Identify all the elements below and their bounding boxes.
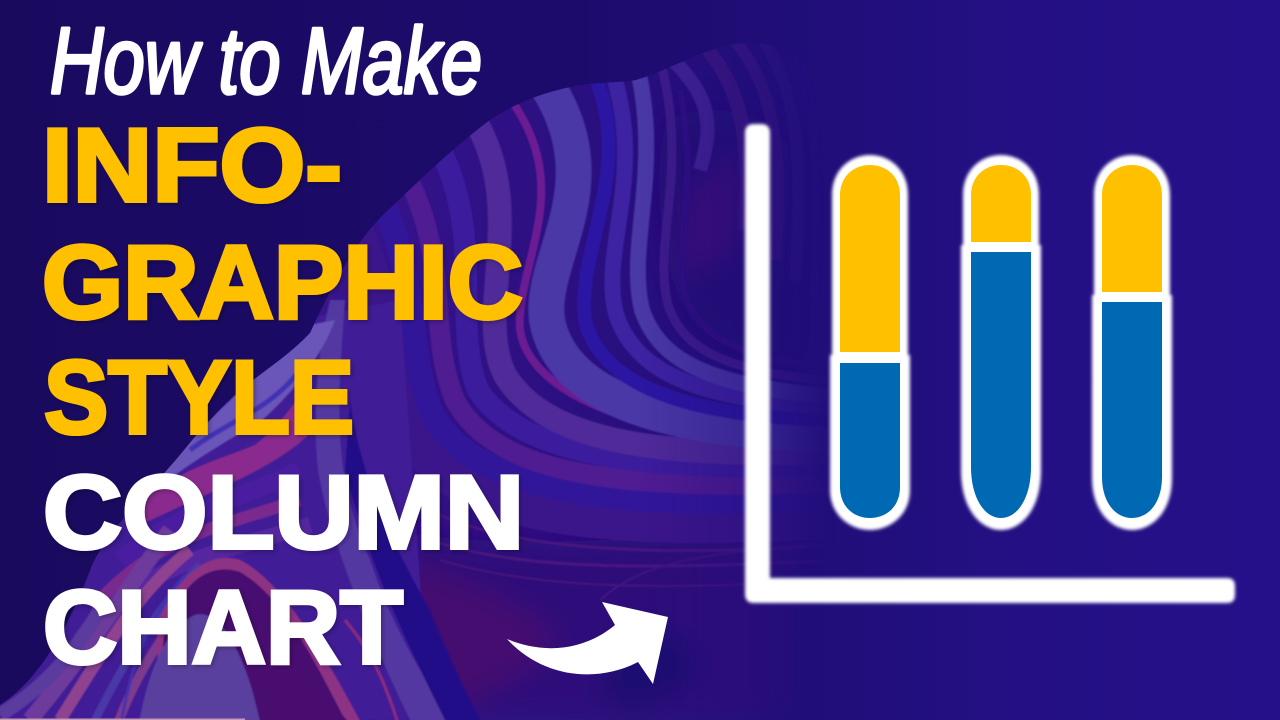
heading line: chart: CHART	[43, 570, 403, 686]
column 2	[961, 155, 1041, 530]
chart axes	[745, 124, 1235, 603]
fine lower contour lines	[421, 506, 798, 552]
heading line: style: STYLE	[44, 340, 354, 456]
soft colour fields	[418, 168, 744, 715]
lower left tent shapes	[157, 558, 365, 720]
bottom edge highlight	[0, 718, 245, 720]
column chart	[745, 124, 1235, 603]
heading: infographic style column chart	[42, 108, 524, 686]
abstract wave artwork	[0, 44, 810, 720]
sweeping bands from crest to right	[360, 229, 796, 543]
left flank colour wedges	[0, 300, 430, 720]
heading line: graphic: GRAPHIC	[42, 225, 523, 341]
heading line: info-: INFO-	[42, 108, 342, 224]
heading line: column: COLUMN	[43, 455, 524, 571]
top right ribs	[670, 61, 715, 172]
arrow pointing to chart	[507, 602, 668, 684]
column 3	[1092, 155, 1172, 530]
heading: how to make: How to Make	[50, 8, 482, 113]
column 1	[830, 155, 910, 530]
